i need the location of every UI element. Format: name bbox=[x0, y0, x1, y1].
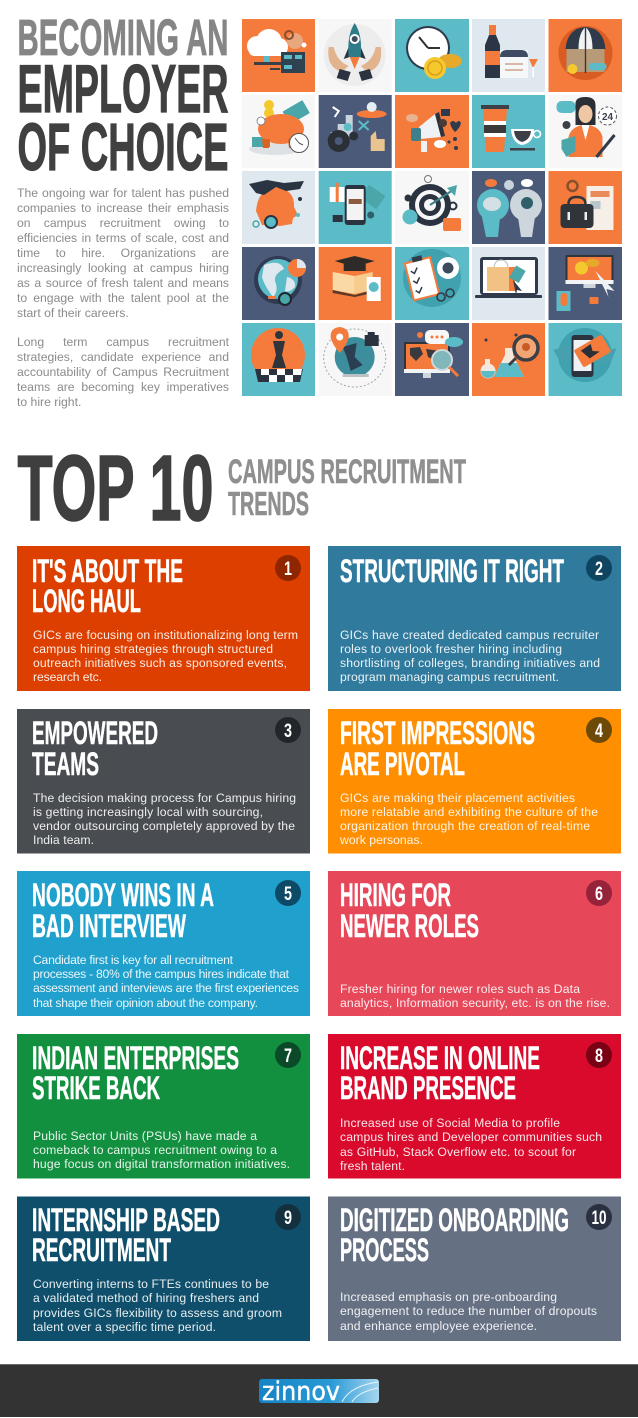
card 1: it's about the long haul: campus hiring strategies through structured bbox=[33, 642, 273, 656]
intro paragraph 2: strategies, candidate experience and bbox=[17, 350, 229, 364]
card 2: structuring it right: program managing campus recruitment. bbox=[340, 670, 559, 684]
card 10: digitized onboarding process: and enhance employee experience. bbox=[340, 1319, 537, 1333]
card 4: first impressions are pivotal: organization through the creation of real-time bbox=[340, 819, 590, 833]
icon tile: coffee cups bbox=[472, 95, 545, 168]
card 1: it's about the long haul bbox=[17, 546, 310, 691]
intro paragraph 2: Long term campus recruitment bbox=[17, 335, 229, 349]
icon tile: phone and credit card bbox=[548, 323, 622, 396]
card 8: increase in online brand presence: campus hires and Developer communities such bbox=[340, 1130, 602, 1144]
card 4: first impressions are pivotal: 4 bbox=[595, 721, 603, 742]
card 6: hiring for newer roles: HIRING FOR bbox=[340, 877, 451, 913]
heading: top 10 campus recruitment trends: CAMPUS RECRUITMENT bbox=[228, 453, 466, 491]
card 6: hiring for newer roles: Fresher hiring for newer roles such as Data bbox=[340, 982, 580, 996]
icon tile: computer and coin bbox=[548, 247, 622, 320]
icon tile: umbrella over bags bbox=[548, 19, 622, 92]
logo: zinnov: zinnov bbox=[262, 1377, 340, 1407]
card 1: it's about the long haul: GICs are focusing on institutionalizing long term bbox=[33, 628, 298, 642]
card 3: empowered teams: The decision making process for Campus hiring bbox=[33, 791, 296, 805]
card 6: hiring for newer roles: 6 bbox=[595, 884, 603, 905]
card 9: internship based recruitment: Converting interns to FTEs continues to be bbox=[33, 1277, 269, 1291]
icon tile: megaphone bbox=[395, 95, 469, 168]
icon tile: clipboard and coffee bbox=[395, 247, 469, 320]
intro paragraph 1: to engage with the talent pool at the bbox=[17, 290, 229, 304]
card 4: first impressions are pivotal: more relatable and exhibiting the culture of the bbox=[340, 805, 598, 819]
icon tile: world map and head bbox=[242, 171, 315, 244]
card 6: hiring for newer roles bbox=[328, 871, 621, 1016]
card 5: nobody wins in a bad interview: processes - 80% of the campus hires indicate that bbox=[33, 967, 290, 981]
intro paragraph 1: The ongoing war for talent has pushed bbox=[17, 186, 229, 200]
card 1: it's about the long haul: IT'S ABOUT THE bbox=[32, 553, 183, 589]
card 5: nobody wins in a bad interview: 5 bbox=[284, 884, 292, 905]
icon tile: briefcase and newspaper bbox=[548, 171, 622, 244]
card 3: empowered teams: 3 bbox=[284, 721, 292, 742]
card 10: digitized onboarding process: PROCESS bbox=[340, 1232, 429, 1268]
footer bar bbox=[0, 1364, 638, 1417]
card 7: indian enterprises strike back bbox=[17, 1034, 310, 1178]
icon tile: bottle and calendar bbox=[472, 19, 545, 92]
icon tile: phone shopping bbox=[319, 171, 392, 244]
card 2: structuring it right: GICs have created dedicated campus recruiter bbox=[340, 628, 599, 642]
card 8: increase in online brand presence: as GitHub, Stack Overflow etc. to scout for bbox=[340, 1145, 576, 1159]
card 2: structuring it right: roles to overlook fresher hiring including bbox=[340, 642, 562, 656]
intro paragraph 1: as a source of fresh talent and means bbox=[17, 276, 229, 290]
intro paragraph 2: accountability of Campus Recruitment bbox=[17, 365, 229, 379]
intro paragraph 1: increasingly looking at campus hiring bbox=[17, 260, 229, 274]
card 7: indian enterprises strike back: STRIKE BACK bbox=[32, 1070, 160, 1106]
card 7: indian enterprises strike back: INDIAN ENTERPRISES bbox=[32, 1040, 239, 1076]
card 6: hiring for newer roles: NEWER ROLES bbox=[340, 908, 479, 944]
card 5: nobody wins in a bad interview: that shape their opinion about the company. bbox=[33, 996, 258, 1010]
card 9: internship based recruitment: RECRUITMENT bbox=[32, 1232, 171, 1268]
card 9: internship based recruitment: a validated method of hiring freshers and bbox=[33, 1291, 259, 1305]
icon tile: cloud server bbox=[242, 19, 315, 92]
icon tile: rocket in hands bbox=[319, 19, 392, 92]
icon tile: laptop shopping bbox=[472, 247, 545, 320]
icon tile: clock and coins bbox=[395, 19, 469, 92]
card 7: indian enterprises strike back: Public Sector Units (PSUs) have made a bbox=[33, 1129, 257, 1143]
card 3: empowered teams: EMPOWERED bbox=[32, 715, 158, 751]
card 10: digitized onboarding process: 10 bbox=[592, 1208, 606, 1229]
icon tile: globe and pie bbox=[242, 247, 315, 320]
intro paragraph 1: on campus recruitment owing to bbox=[17, 216, 229, 230]
card 5: nobody wins in a bad interview: NOBODY WINS IN A bbox=[32, 877, 214, 913]
card 1: it's about the long haul: LONG HAUL bbox=[32, 583, 141, 619]
icon tile: support agent bbox=[548, 95, 622, 168]
card 9: internship based recruitment: provides GICs flexibility to assess and groom bbox=[33, 1306, 282, 1320]
card 8: increase in online brand presence: 8 bbox=[595, 1046, 603, 1067]
card 6: hiring for newer roles: analytics, Information security, etc. is on the rise. bbox=[340, 996, 610, 1010]
card 2: structuring it right: 2 bbox=[595, 559, 603, 580]
intro paragraph 1 bbox=[17, 186, 229, 320]
card 5: nobody wins in a bad interview bbox=[17, 871, 310, 1016]
icon tile: book and graduation cap bbox=[319, 247, 392, 320]
card 4: first impressions are pivotal bbox=[328, 709, 621, 854]
heading: top 10 campus recruitment trends: TRENDS bbox=[228, 485, 309, 522]
icon tile: support agent: 24 bbox=[602, 112, 613, 123]
icon tile: stairs and gears bbox=[319, 95, 392, 168]
card 5: nobody wins in a bad interview: assessment and interviews are the first experiences bbox=[33, 981, 299, 995]
card 8: increase in online brand presence: BRAND PRESENCE bbox=[340, 1070, 516, 1106]
card 5: nobody wins in a bad interview: BAD INTERVIEW bbox=[32, 908, 186, 944]
icon tile: flask and magnifier bbox=[472, 323, 545, 396]
card 4: first impressions are pivotal: GICs are making their placement activities bbox=[340, 791, 575, 805]
intro paragraph 2: teams are becoming key imperatives bbox=[17, 380, 229, 394]
card 8: increase in online brand presence: Increased use of Social Media to profile bbox=[340, 1116, 560, 1130]
title: becoming an employer of choice: EMPLOYER bbox=[18, 51, 228, 127]
card 9: internship based recruitment bbox=[17, 1196, 310, 1341]
icon grid bbox=[242, 19, 622, 396]
icon tile: global location bbox=[319, 323, 392, 396]
card 3: empowered teams: TEAMS bbox=[32, 746, 99, 782]
intro paragraph 1: companies to increase their emphasis bbox=[17, 200, 229, 214]
card 2: structuring it right: shortlisting of colleges, branding initiatives and bbox=[340, 656, 600, 670]
card 8: increase in online brand presence: fresh talent. bbox=[340, 1159, 405, 1173]
card 3: empowered teams: India team. bbox=[33, 833, 94, 847]
intro paragraph 1: start of their careers. bbox=[17, 306, 129, 320]
card 1: it's about the long haul: research etc. bbox=[33, 670, 102, 684]
card 10: digitized onboarding process: engagement to reduce the number of dropouts bbox=[340, 1304, 597, 1318]
icon tile: piggy bank bbox=[242, 95, 315, 168]
icon tile: two heads bbox=[472, 171, 545, 244]
card 7: indian enterprises strike back: huge focus on digital transformation initiatives. bbox=[33, 1157, 290, 1171]
card 3: empowered teams bbox=[17, 709, 310, 854]
intro paragraph 2 bbox=[17, 335, 229, 409]
icon tile: chess piece bbox=[242, 323, 315, 396]
intro paragraph 2: to hire right. bbox=[17, 395, 81, 409]
card 9: internship based recruitment: talent over a specific time period. bbox=[33, 1320, 216, 1334]
card 7: indian enterprises strike back: comeback to campus recruitment owing to a bbox=[33, 1143, 277, 1157]
card 4: first impressions are pivotal: ARE PIVOTAL bbox=[340, 746, 465, 782]
card 3: empowered teams: vendor outsourcing completely approved by the bbox=[33, 819, 295, 833]
title: becoming an employer of choice: BECOMING AN bbox=[18, 9, 228, 66]
card 8: increase in online brand presence bbox=[328, 1034, 621, 1178]
title: becoming an employer of choice: OF CHOICE bbox=[18, 110, 228, 185]
card 7: indian enterprises strike back: 7 bbox=[284, 1046, 292, 1067]
card 9: internship based recruitment: INTERNSHIP BASED bbox=[32, 1202, 220, 1238]
card 4: first impressions are pivotal: work personas. bbox=[339, 833, 423, 847]
intro paragraph 1: efficiencies in terms of scale, cost and bbox=[17, 230, 229, 244]
card 1: it's about the long haul: outreach initiatives such as sponsored events, bbox=[33, 656, 287, 670]
card 3: empowered teams: is getting increasingly local with sourcing, bbox=[33, 805, 263, 819]
card 5: nobody wins in a bad interview: Candidate first is key for all recruitment bbox=[33, 953, 234, 967]
card 10: digitized onboarding process bbox=[328, 1196, 621, 1341]
icon tile: target and arrow bbox=[395, 171, 469, 244]
card 9: internship based recruitment: 9 bbox=[284, 1208, 292, 1229]
heading: top 10 campus recruitment trends: TOP 10 bbox=[18, 436, 214, 540]
card 1: it's about the long haul: 1 bbox=[284, 559, 292, 580]
title: becoming an employer of choice bbox=[18, 9, 228, 185]
card 2: structuring it right bbox=[328, 546, 621, 691]
icon tile: monitor and magnifier bbox=[395, 323, 469, 396]
intro paragraph 1: time to hire. Organizations are bbox=[17, 246, 229, 260]
card 10: digitized onboarding process: Increased emphasis on pre-onboarding bbox=[340, 1290, 557, 1304]
